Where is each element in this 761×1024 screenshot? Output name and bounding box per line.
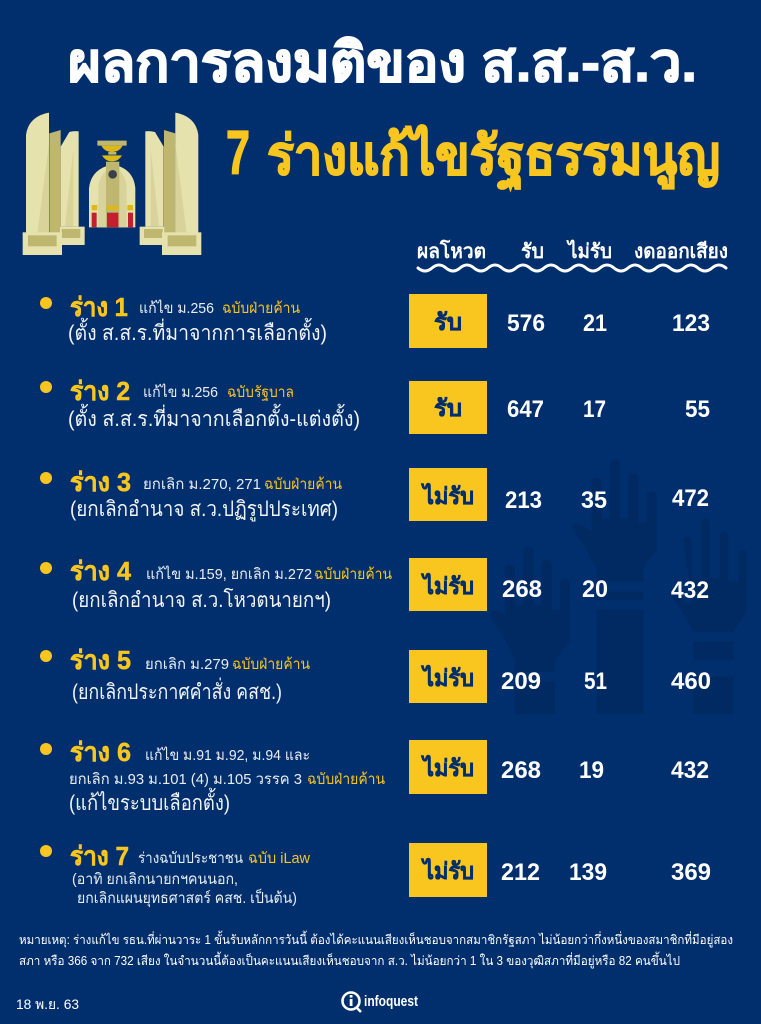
row 7: (อาทิ ยกเลิกนายกฯคนนอก, [72,871,238,888]
row 5 [40,645,711,704]
row 3: 35 [581,487,607,514]
row 4: 432 [671,577,709,604]
row 5: ฉบับฝ่ายค้าน [232,656,310,673]
row 4 [40,556,709,612]
row 5: 209 [501,668,541,695]
row 4: 268 [502,576,542,603]
table header: ไม่รับ [566,239,612,263]
row 2: (ตั้ง ส.ส.ร.ที่มาจากเลือกตั้ง-แต่งตั้ง) [68,404,360,431]
table header: งดออกเสียง [634,240,728,263]
row 3: 472 [672,485,709,512]
footnote [19,930,733,969]
row 1: แก้ไข ม.256 [139,299,214,317]
row 5: 51 [584,668,607,695]
row 7: ร่างฉบับประชาชน [138,850,243,867]
row 4: ไม่รับ [420,572,474,599]
row 2 [40,376,710,434]
logo: infoquest [342,992,418,1012]
row 6: 19 [579,757,604,784]
row 6: 432 [671,757,709,784]
row 1: ร่าง 1 [70,292,128,322]
row 7: 139 [569,859,607,886]
row 1: (ตั้ง ส.ส.ร.ที่มาจากการเลือกตั้ง) [68,318,327,345]
row 2: ร่าง 2 [70,376,130,406]
table header: ผลโหวต [417,239,486,263]
background icon: raised hands [490,460,747,714]
row 3: ไม่รับ [420,482,474,509]
row 7: ยกเลิกแผนยุทธศาสตร์ คสช. เป็นต้น) [77,888,297,908]
row 6: แก้ไข ม.91 ม.92, ม.94 และ [145,746,310,764]
footnote: สภา หรือ 366 จาก 732 เสียง ในจำนวนนี้ต้องเป็นคะแนนเสียงเห็นชอบจาก ส.ว. ไม่น้อยกว่า 1 ใน 3 ของวุฒิสภาที่มีอยู่หรือ 82 คนขึ้นไป [19,951,680,969]
row 6: ไม่รับ [420,754,474,781]
row 3: ร่าง 3 [70,467,131,497]
wavy header rule [418,265,726,271]
row 4: 20 [582,576,608,603]
row 1: 123 [672,310,710,337]
table header: รับ [521,241,544,263]
row 1: 576 [507,310,545,337]
title line 2: 7 [226,119,250,188]
row 3 [40,467,709,522]
row 7: ไม่รับ [420,857,474,884]
row 7: 369 [671,859,711,886]
row 6: 268 [501,757,541,784]
row 2: 17 [583,396,606,423]
row 1: 21 [583,310,607,337]
row 5: ยกเลิก ม.279 [145,656,229,673]
row 1: ฉบับฝ่ายค้าน [222,300,300,317]
row 5: ไม่รับ [420,664,474,691]
row 4: ร่าง 4 [70,556,132,586]
title line 1: ผลการลงมติของ ส.ส.-ส.ว. [68,33,697,93]
row 4: แก้ไข ม.159, ยกเลิก ม.272 [146,565,312,583]
row 7: ร่าง 7 [70,841,129,871]
row 2: 55 [685,396,710,423]
row 5: (ยกเลิกประกาศคำสั่ง คสช.) [72,677,282,704]
row 7: 212 [501,859,540,886]
row 1: รับ [434,309,462,335]
row 6: ยกเลิก ม.93 ม.101 (4) ม.105 วรรค 3 [69,771,302,788]
row 2: 647 [507,396,544,423]
icon: democracy monument [23,113,201,255]
row 2: แก้ไข ม.256 [143,383,218,401]
row 3: 213 [505,487,542,514]
row 2: รับ [434,395,462,421]
row 1 [40,292,710,348]
row 5: ร่าง 5 [70,645,131,675]
row 4: (ยกเลิกอำนาจ ส.ว.โหวตนายกฯ) [72,588,331,612]
row 2: ฉบับรัฐบาล [227,384,294,401]
row 6: (แก้ไขระบบเลือกตั้ง) [69,788,230,815]
row 5: 460 [671,668,711,695]
row 3: ฉบับฝ่ายค้าน [264,476,342,493]
title line 2: ร่างแก้ไขรัฐธรรมนูญ [267,124,720,191]
row 6 [40,737,709,815]
row 4: ฉบับฝ่ายค้าน [314,566,392,583]
row 6: ร่าง 6 [70,737,131,767]
row 6: ฉบับฝ่ายค้าน [307,771,385,788]
logo: infoquest: infoquest [364,993,418,1010]
row 3: ยกเลิก ม.270, 271 [143,476,261,493]
row 7: ฉบับ iLaw [248,850,310,867]
date: 18 พ.ย. 63 [16,996,79,1012]
row 3: (ยกเลิกอำนาจ ส.ว.ปฏิรูปประเทศ) [70,498,338,522]
table header [417,239,728,263]
row 7 [40,841,711,908]
